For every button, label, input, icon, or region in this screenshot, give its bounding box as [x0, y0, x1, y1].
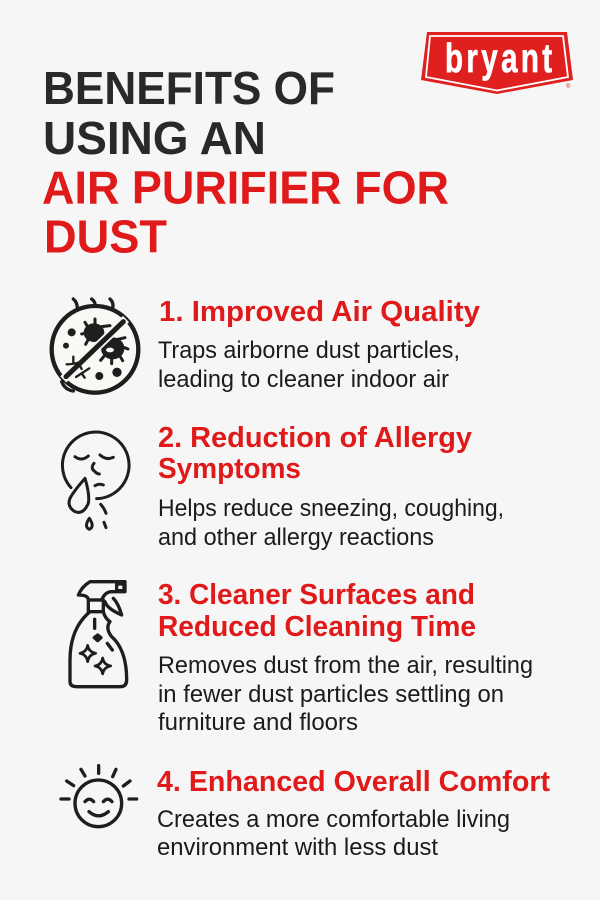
heading: reduction of allergy symptoms: Symptoms	[158, 453, 301, 485]
title: DUST	[44, 210, 167, 262]
icon: sneezing face	[62, 432, 129, 529]
text: allergy symptoms description: and other allergy reactions	[158, 524, 434, 551]
text: cleaner surfaces description: furniture and floors	[158, 709, 358, 736]
icon: smiling sun	[61, 766, 137, 827]
icon: crossed-out dust and germs	[52, 299, 138, 393]
logo: bryant	[421, 32, 573, 94]
logo: bryant: bryant	[445, 35, 556, 81]
heading: reduction of allergy symptoms: 2. Reduction of Allergy	[158, 422, 472, 454]
text: allergy symptoms description	[158, 495, 504, 551]
text: improved air quality description	[158, 337, 460, 393]
text: improved air quality description: leading to cleaner indoor air	[158, 366, 449, 393]
text: overall comfort description: environment with less dust	[157, 834, 438, 861]
heading: cleaner surfaces: Reduced Cleaning Time	[158, 611, 476, 643]
heading: enhanced overall comfort: 4. Enhanced Overall Comfort	[157, 766, 550, 798]
heading: cleaner surfaces: 3. Cleaner Surfaces and	[158, 579, 475, 611]
heading: cleaner surfaces	[158, 579, 476, 643]
logo: bryant: ®	[566, 83, 571, 90]
text: overall comfort description	[157, 806, 510, 861]
title: USING AN	[43, 112, 266, 164]
heading: reduction of allergy symptoms	[158, 422, 472, 485]
icon: spray bottle	[70, 582, 127, 687]
text: overall comfort description: Creates a more comfortable living	[157, 806, 510, 833]
heading: improved air quality: 1. Improved Air Quality	[159, 296, 480, 328]
text: cleaner surfaces description	[158, 652, 533, 736]
text: improved air quality description: Traps airborne dust particles,	[158, 337, 460, 364]
text: allergy symptoms description: Helps reduce sneezing, coughing,	[158, 495, 504, 522]
text: cleaner surfaces description: Removes dust from the air, resulting	[158, 652, 533, 679]
text: cleaner surfaces description: in fewer dust particles settling on	[158, 681, 504, 708]
title: AIR PURIFIER FOR	[42, 162, 449, 214]
title	[42, 62, 449, 262]
title: BENEFITS OF	[43, 62, 335, 114]
